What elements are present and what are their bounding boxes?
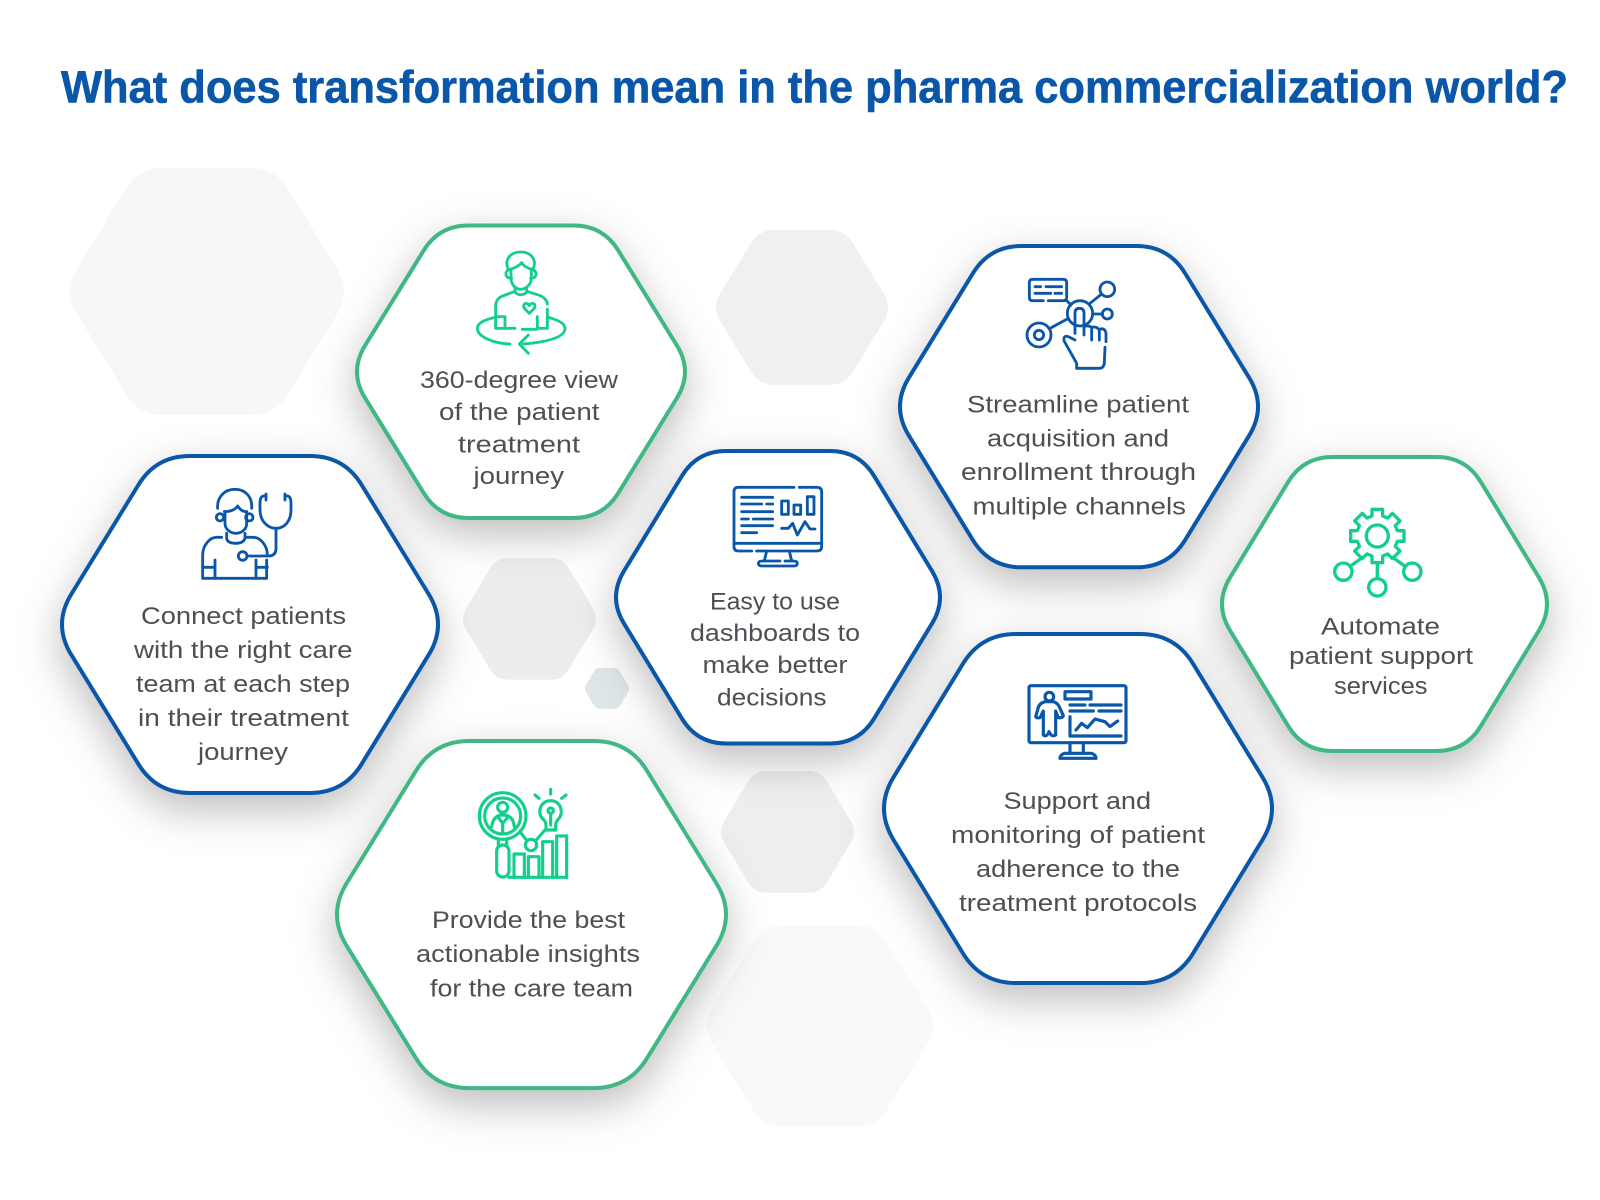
- text: connect patients with care team: journey: [197, 739, 289, 766]
- panel: automate patient support: [1222, 457, 1547, 751]
- text: automate patient support: services: [1334, 673, 1428, 700]
- hexagon outline: [1222, 457, 1547, 751]
- text: actionable insights: for the care team: [430, 976, 633, 1002]
- icon: doctor with stethoscope: [203, 489, 291, 578]
- panel: actionable insights: [337, 741, 726, 1088]
- text: 360-degree view: 360-degree view: [420, 367, 618, 394]
- panel: support and monitoring: [884, 634, 1272, 983]
- title: What does transformation mean in the pharma commercialization world?: [61, 62, 1568, 112]
- icon: hand touching network: [1027, 279, 1115, 368]
- hexagon outline: [337, 741, 726, 1088]
- hexagon outline: [616, 451, 940, 743]
- hexagon outline: [62, 456, 438, 793]
- icon: dashboard monitor: [734, 487, 822, 566]
- text: connect patients with care team: in their treatment: [138, 705, 349, 732]
- text: 360-degree view: treatment: [458, 432, 580, 458]
- panel: 360-degree view: [357, 226, 685, 518]
- text: automate patient support: patient support: [1289, 643, 1473, 670]
- hexagon outline: [884, 634, 1272, 983]
- text: easy to use dashboards: [690, 588, 860, 712]
- text: streamline patient acquisition: multiple channels: [972, 494, 1186, 520]
- text: streamline patient acquisition: enrollment through: [961, 459, 1196, 486]
- text: support and monitoring: monitoring of patient: [951, 822, 1205, 849]
- text: easy to use dashboards: dashboards to: [690, 620, 860, 647]
- text: easy to use dashboards: make better: [702, 652, 848, 679]
- text: easy to use dashboards: decisions: [717, 684, 826, 712]
- text: support and monitoring: [951, 788, 1205, 917]
- panel: streamline patient acquisition: [900, 246, 1258, 567]
- text: 360-degree view: [420, 367, 618, 490]
- icon: magnifier, lightbulb and bars: [479, 789, 567, 877]
- text: streamline patient acquisition: [961, 392, 1196, 520]
- text: connect patients with care team: team at each step: [136, 671, 350, 698]
- text: actionable insights: actionable insights: [416, 941, 640, 968]
- text: streamline patient acquisition: acquisition and: [987, 426, 1169, 452]
- text: actionable insights: Provide the best: [432, 907, 625, 934]
- text: support and monitoring: Support and: [1004, 788, 1151, 815]
- text: 360-degree view: journey: [472, 463, 565, 490]
- text: easy to use dashboards: Easy to use: [710, 588, 840, 616]
- text: 360-degree view: of the patient: [439, 399, 600, 426]
- text: connect patients with care team: with the right care: [133, 637, 352, 664]
- panel: easy to use dashboards: [616, 451, 940, 743]
- hexagon outline: [357, 226, 685, 518]
- text: support and monitoring: adherence to the: [976, 856, 1180, 883]
- text: connect patients with care team: [133, 603, 352, 766]
- text: automate patient support: [1289, 614, 1473, 700]
- icon: gear network: [1335, 509, 1421, 596]
- icon: patient with rotating arrow: [477, 252, 565, 353]
- background hexagons: [70, 168, 933, 1127]
- text: connect patients with care team: Connect patients: [141, 603, 346, 630]
- icon: monitor with patient chart: [1029, 686, 1126, 758]
- text: support and monitoring: treatment protocols: [959, 890, 1197, 917]
- text: streamline patient acquisition: Streamline patient: [967, 392, 1189, 418]
- hexagon outline: [900, 246, 1258, 567]
- panel: connect patients with care team: [62, 456, 438, 793]
- text: automate patient support: Automate: [1321, 614, 1440, 640]
- text: actionable insights: [416, 907, 640, 1002]
